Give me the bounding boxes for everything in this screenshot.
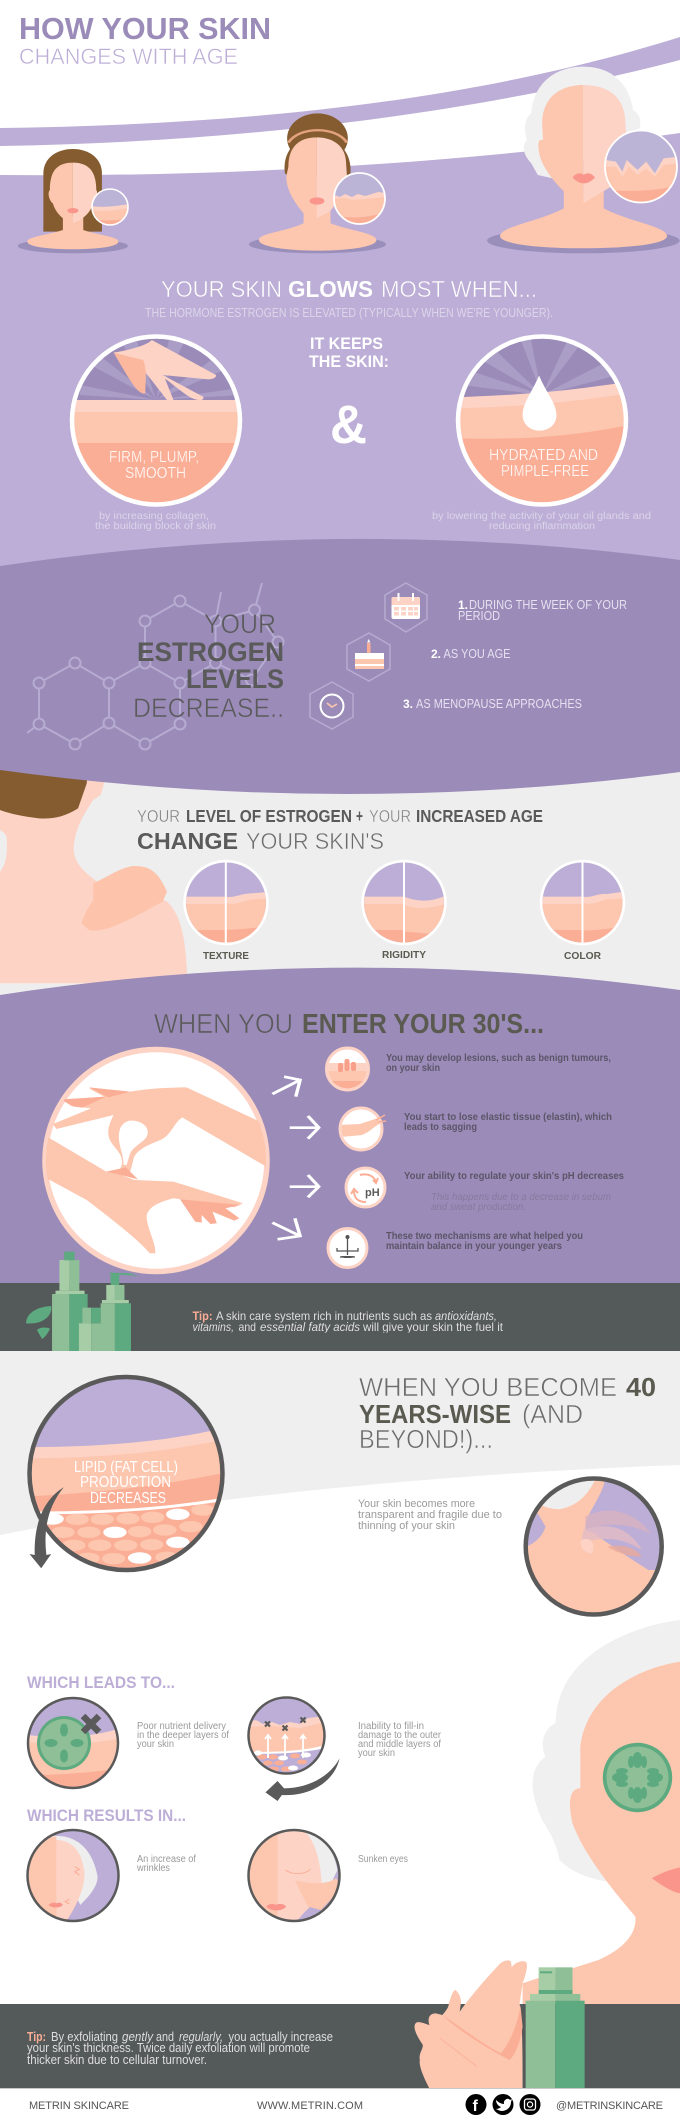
arrow: lipid down bbox=[29, 1487, 64, 1568]
bottles and leaves bbox=[26, 1252, 139, 1351]
circle: rigidity bbox=[360, 860, 449, 947]
caption: collagen bbox=[95, 510, 216, 532]
title: CHANGES WITH AGE bbox=[19, 44, 238, 69]
person from behind bbox=[0, 757, 187, 983]
text: transparent skin bbox=[358, 1498, 502, 1532]
icon: birthday cake hexagon bbox=[347, 633, 390, 681]
text: wrinkles: An increase of bbox=[137, 1854, 196, 1865]
list: when estrogen falls: 1. bbox=[458, 598, 468, 612]
it keeps the skin bbox=[309, 335, 389, 371]
heading: when you become 40: YEARS-WISE bbox=[359, 1399, 511, 1429]
text: transparent skin: transparent and fragile due to bbox=[358, 1509, 502, 1521]
text: inability: and middle layers of bbox=[358, 1739, 441, 1750]
arrow: curved bbox=[265, 1758, 340, 1801]
icon: lesions bbox=[326, 1048, 369, 1091]
text: transparent skin: thinning of your skin bbox=[358, 1520, 455, 1532]
tip: exfoliating: your skin's thickness. Twice daily exfoliation will promote bbox=[27, 2041, 310, 2055]
tip: nutrients: will give your skin the fuel it bbox=[362, 1320, 504, 1334]
tip: nutrients: Tip: bbox=[192, 1309, 212, 1323]
heading: when you become 40: BEYOND!)... bbox=[359, 1424, 493, 1454]
circle: firm plump smooth bbox=[70, 335, 245, 513]
text: inability: Inability to fill-in bbox=[358, 1721, 424, 1732]
heading: when you become 40: 40 bbox=[626, 1372, 656, 1402]
text: elastin: leads to sagging bbox=[404, 1121, 477, 1133]
text: wrinkles bbox=[136, 1854, 196, 1874]
text: inability: your skin bbox=[358, 1748, 395, 1759]
heading: your estrogen levels decrease: ESTROGEN bbox=[137, 637, 284, 667]
title: HOW YOUR SKIN bbox=[19, 12, 271, 46]
heading: your estrogen levels decrease bbox=[133, 609, 284, 723]
subheading: hormone estrogen: THE HORMONE ESTROGEN IS ELEVATED (TYPICALLY WHEN WE'RE YOUNGER). bbox=[145, 306, 553, 320]
skin inset: adult bbox=[334, 173, 386, 225]
labels: texture rigidity color: RIGIDITY bbox=[382, 950, 426, 961]
molecule diagram bbox=[27, 583, 284, 750]
heading: estrogen and age: + bbox=[356, 806, 363, 826]
panel: grey texture section background bbox=[0, 700, 680, 1000]
bottle bbox=[526, 1967, 585, 2088]
list: when estrogen falls: 2. bbox=[431, 647, 441, 661]
circle: inability to fill in bbox=[247, 1696, 327, 1776]
list: when estrogen falls: AS MENOPAUSE APPROACHES bbox=[416, 696, 582, 711]
text: inability bbox=[358, 1721, 442, 1759]
heading: when you become 40: (AND bbox=[522, 1399, 583, 1429]
heading: your skin glows: GLOWS bbox=[288, 276, 373, 302]
panel: thirties section bbox=[0, 968, 680, 1283]
text: pH: This happens due to a decrease in sebum bbox=[431, 1191, 611, 1203]
tip: exfoliating: Tip: bbox=[27, 2030, 46, 2044]
skin inset: older bbox=[604, 130, 680, 204]
text: sunken eyes: Sunken eyes bbox=[358, 1854, 408, 1865]
circle: poor nutrient delivery bbox=[26, 1696, 121, 1791]
labels: texture rigidity color: COLOR bbox=[564, 951, 602, 962]
icon: pH: pH bbox=[365, 1187, 380, 1199]
footer: brand: METRIN SKINCARE bbox=[29, 2100, 129, 2112]
heading: which leads to: WHICH LEADS TO... bbox=[27, 1674, 175, 1692]
heading: your skin glows: MOST WHEN... bbox=[381, 276, 537, 302]
label: lipid production decreases: DECREASES bbox=[90, 1490, 166, 1507]
arrows bbox=[272, 1077, 319, 1239]
text: transparent skin: Your skin becomes more bbox=[358, 1498, 475, 1510]
label: hydrated: PIMPLE-FREE bbox=[501, 463, 589, 480]
label: firm plump smooth bbox=[109, 449, 199, 482]
title bbox=[19, 12, 271, 69]
footer: website: WWW.METRIN.COM bbox=[257, 2100, 363, 2112]
icon: clock hexagon bbox=[310, 682, 353, 729]
label: lipid production decreases: PRODUCTION bbox=[80, 1474, 171, 1491]
text: lesions: You may develop lesions, such as benign tumours, bbox=[386, 1052, 611, 1064]
skin inset: young bbox=[90, 187, 130, 227]
heading: when you enter your 30's bbox=[154, 1008, 544, 1039]
icon: cucumber slice on eye bbox=[603, 1743, 672, 1812]
tip: exfoliating: and bbox=[156, 2030, 174, 2044]
list: when estrogen falls: DURING THE WEEK OF YOUR bbox=[469, 597, 627, 612]
tip: nutrients: essential fatty acids bbox=[260, 1320, 360, 1334]
text: poor nutrient: your skin bbox=[137, 1739, 174, 1750]
labels: texture rigidity color: TEXTURE bbox=[203, 951, 249, 962]
tip: exfoliating: thicker skin due to cellular turnover. bbox=[27, 2053, 207, 2067]
young woman portrait bbox=[18, 149, 128, 253]
text: wrinkles: wrinkles bbox=[136, 1863, 170, 1874]
tip: exfoliating: regularly, bbox=[179, 2030, 223, 2044]
heading: when you become 40: WHEN YOU BECOME bbox=[359, 1372, 617, 1402]
tip: nutrients bbox=[192, 1311, 503, 1333]
list: when estrogen falls: AS YOU AGE bbox=[444, 646, 511, 661]
circle: lipid production bbox=[22, 1370, 230, 1577]
hands holding bottle bbox=[415, 1960, 527, 2088]
text: balance: maintain balance in your younger years bbox=[386, 1240, 562, 1252]
icon: instagram bbox=[520, 2094, 540, 2115]
icon: facebook: f bbox=[472, 2098, 478, 2115]
panel: forties section background bbox=[0, 1351, 680, 1571]
circle: thin neck skin bbox=[520, 1473, 670, 1620]
heading: estrogen and age: YOUR bbox=[137, 806, 180, 826]
ampersand: & bbox=[330, 395, 367, 455]
label: firm plump smooth: FIRM, PLUMP, bbox=[109, 449, 199, 466]
caption: collagen: by increasing collagen, bbox=[99, 510, 209, 522]
text: lesions bbox=[386, 1052, 611, 1074]
text: poor nutrient: Poor nutrient delivery bbox=[137, 1721, 226, 1732]
text: poor nutrient: in the deeper layers of bbox=[137, 1730, 229, 1741]
heading: when you become 40 bbox=[359, 1372, 656, 1454]
caption: oil glands: reducing inflammation bbox=[489, 520, 595, 532]
heading: your estrogen levels decrease: DECREASE.. bbox=[133, 693, 284, 723]
circle: color bbox=[538, 860, 627, 947]
text: elastin bbox=[404, 1111, 612, 1133]
caption: oil glands bbox=[432, 510, 651, 532]
heading: estrogen and age: YOUR bbox=[369, 806, 411, 826]
panel: estrogen decrease band bbox=[0, 539, 680, 794]
heading: your skin glows: YOUR SKIN bbox=[161, 276, 282, 302]
list: when estrogen falls: PERIOD bbox=[458, 608, 500, 623]
text: balance: These two mechanisms are what helped you bbox=[386, 1230, 583, 1242]
icon: arm sagging bbox=[340, 1108, 386, 1150]
heading: change your skin's bbox=[137, 828, 384, 854]
tip: nutrients: A skin care system rich in nutrients such as bbox=[216, 1309, 432, 1323]
tip: nutrients: vitamins, bbox=[192, 1320, 234, 1334]
white sweep bbox=[0, 1465, 680, 2010]
heading: estrogen and age: LEVEL OF ESTROGEN bbox=[186, 806, 352, 826]
circle: wrinkles bbox=[22, 1828, 121, 1927]
tip: exfoliating bbox=[27, 2030, 333, 2067]
heading: estrogen and age: INCREASED AGE bbox=[416, 806, 543, 826]
icon: calendar hexagon bbox=[385, 583, 427, 632]
tip: exfoliating: gently bbox=[122, 2030, 154, 2044]
panel: tip band bbox=[0, 1283, 680, 1351]
circle: pinching hands bbox=[39, 1050, 278, 1272]
ribbon bbox=[0, 37, 680, 146]
caption: collagen: the building block of skin bbox=[95, 520, 216, 532]
text: pH bbox=[404, 1170, 624, 1213]
tip: nutrients: antioxidants, bbox=[435, 1309, 497, 1323]
heading: which results in: WHICH RESULTS IN... bbox=[27, 1807, 186, 1825]
tip: exfoliating: you actually increase bbox=[228, 2030, 333, 2044]
label: lipid production decreases bbox=[74, 1459, 178, 1507]
icon: facebook bbox=[466, 2094, 486, 2115]
heading: your skin glows bbox=[161, 276, 537, 302]
list: when estrogen falls bbox=[403, 597, 627, 711]
older woman portrait bbox=[487, 67, 680, 253]
heading: estrogen and age bbox=[137, 806, 543, 826]
footer rule bbox=[0, 2088, 680, 2089]
panel: lavender background bbox=[0, 133, 680, 620]
text: poor nutrient bbox=[137, 1721, 229, 1750]
tip: nutrients: and bbox=[238, 1320, 256, 1334]
adult woman portrait bbox=[249, 113, 386, 253]
list: when estrogen falls: 3. bbox=[403, 697, 413, 711]
labels: texture rigidity color bbox=[203, 950, 602, 962]
text: elastin: You start to lose elastic tissue (elastin), which bbox=[404, 1111, 612, 1123]
caption: oil glands: by lowering the activity of your oil glands and bbox=[432, 510, 651, 522]
panel: bottom tip band bbox=[0, 2004, 680, 2088]
label: firm plump smooth: SMOOTH bbox=[125, 465, 186, 482]
text: balance bbox=[386, 1230, 583, 1252]
icon: water drop bbox=[523, 376, 556, 431]
icon: twitter bbox=[492, 2094, 514, 2115]
icon: pH bbox=[346, 1168, 385, 1207]
text: pH: Your ability to regulate your skin's pH decreases bbox=[404, 1170, 624, 1182]
it keeps the skin: THE SKIN: bbox=[309, 353, 389, 371]
footer: handle: @METRINSKINCARE bbox=[556, 2100, 663, 2112]
circle: sunken eyes bbox=[243, 1827, 343, 1923]
circle: texture bbox=[182, 860, 271, 947]
label: hydrated: HYDRATED AND bbox=[489, 447, 598, 464]
circle: hydrated and pimple-free bbox=[455, 335, 631, 510]
text: pH: and sweat production. bbox=[431, 1201, 526, 1213]
heading: your estrogen levels decrease: YOUR bbox=[204, 609, 276, 639]
heading: when you enter your 30's: ENTER YOUR 30'S... bbox=[302, 1008, 544, 1039]
big face with cucumber bbox=[523, 1620, 680, 2004]
heading: your estrogen levels decrease: LEVELS bbox=[186, 664, 284, 694]
heading: change your skin's: CHANGE bbox=[137, 828, 238, 854]
label: hydrated bbox=[489, 447, 598, 480]
icon: balance bbox=[328, 1228, 367, 1268]
tip: exfoliating: By exfoliating bbox=[51, 2030, 118, 2044]
heading: when you enter your 30's: WHEN YOU bbox=[154, 1008, 293, 1039]
it keeps the skin: IT KEEPS bbox=[310, 335, 383, 353]
text: inability: damage to the outer bbox=[358, 1730, 442, 1741]
label: lipid production decreases: LIPID (FAT CELL) bbox=[74, 1459, 178, 1476]
text: lesions: on your skin bbox=[386, 1062, 440, 1074]
heading: change your skin's: YOUR SKIN'S bbox=[246, 828, 384, 854]
